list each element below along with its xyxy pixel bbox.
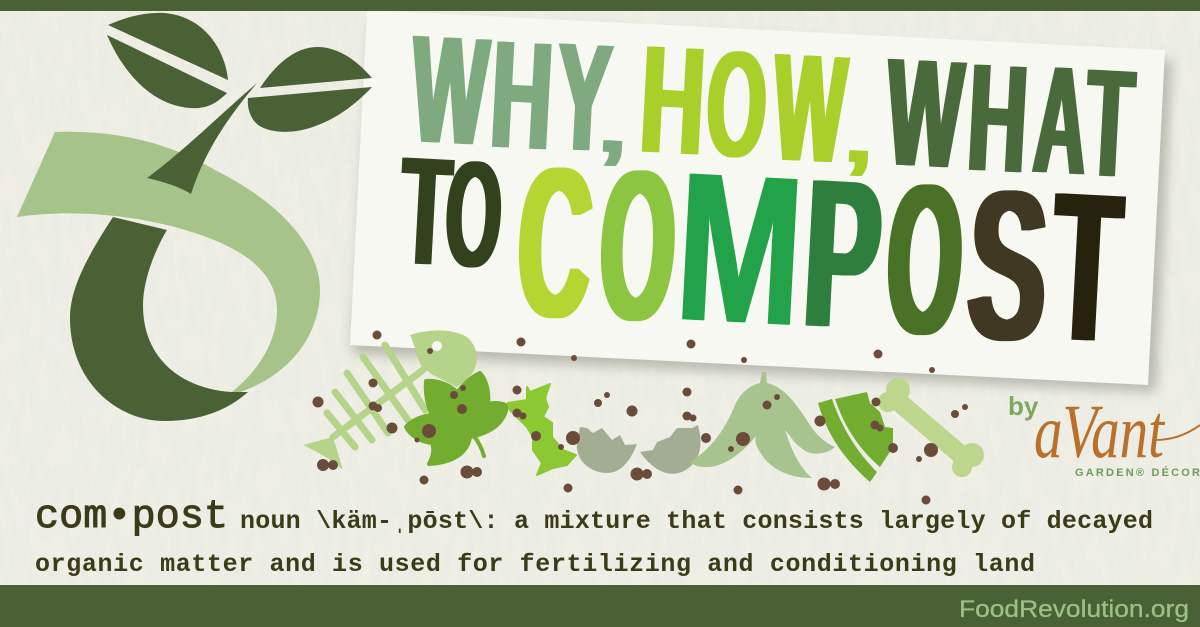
title line: WHY: Y [552, 10, 616, 186]
title line: WHY: , [597, 72, 630, 174]
title line: COMPOST: T [1048, 146, 1126, 388]
title line: TO [397, 123, 506, 302]
title line: COMPOST: C [513, 120, 597, 365]
logo light ribbon [17, 132, 320, 392]
icon: bone [878, 378, 984, 477]
icon: left eggshell [577, 427, 637, 473]
title line: WHAT [883, 26, 1137, 212]
definition line 1: noun \käm-ˌpōst\: a mixture that consists largely of decayed [240, 507, 1153, 536]
title card [350, 3, 1165, 388]
title line: COMPOST [513, 120, 1126, 388]
brand tagline: GARDEN® DÉCOR [1075, 466, 1200, 479]
title line: HOW: , [843, 82, 876, 184]
title line: WHAT: T [1082, 36, 1137, 212]
title line: TO: O [442, 128, 506, 302]
title line: HOW [637, 11, 876, 198]
title line: WHY: W [408, 3, 492, 180]
icon: fish bones [303, 330, 477, 470]
title line: WHAT: H [964, 30, 1032, 207]
title letter M: M [671, 127, 808, 370]
sprout logo [17, 13, 372, 421]
title line: HOW: H [637, 11, 709, 189]
compost scraps [303, 330, 984, 504]
credit: by Avant Garden Decor [1008, 390, 1200, 479]
definition headword: com•post [35, 495, 228, 540]
brand swoosh [1155, 425, 1200, 440]
title line: TO: T [397, 123, 455, 300]
icon: maple leaf [406, 373, 507, 464]
credit word: by: by [1008, 391, 1039, 421]
title line: HOW: W [769, 20, 850, 198]
title line: COMPOST: O [595, 124, 681, 369]
logo dark loop [70, 217, 248, 421]
title line: WHY: H [487, 7, 557, 184]
title line: COMPOST: P [800, 134, 886, 376]
icon: watermelon rind [818, 392, 893, 482]
definition [35, 495, 1153, 579]
title line: WHY [408, 3, 630, 186]
definition line 2: organic matter and is used for fertilizing and conditioning land [35, 550, 1035, 579]
bottom bar [0, 585, 1200, 627]
icon: banana peel [690, 372, 835, 478]
title line: WHAT: A [1030, 32, 1091, 209]
icon: right eggshell [640, 425, 700, 474]
title line: WHAT: W [883, 26, 967, 203]
logo left leaf [107, 13, 228, 108]
source credit: FoodRevolution.org [959, 596, 1189, 623]
icon: apple core [508, 384, 576, 475]
title card shadow [352, 20, 1172, 392]
title line: COMPOST: S [963, 142, 1053, 388]
logo right leaf [248, 47, 372, 132]
soil specks [312, 330, 968, 504]
title line: HOW: O [703, 18, 771, 191]
title line: COMPOST: O [882, 138, 968, 383]
top bar [0, 0, 1200, 11]
logo sprout stem [147, 83, 257, 194]
